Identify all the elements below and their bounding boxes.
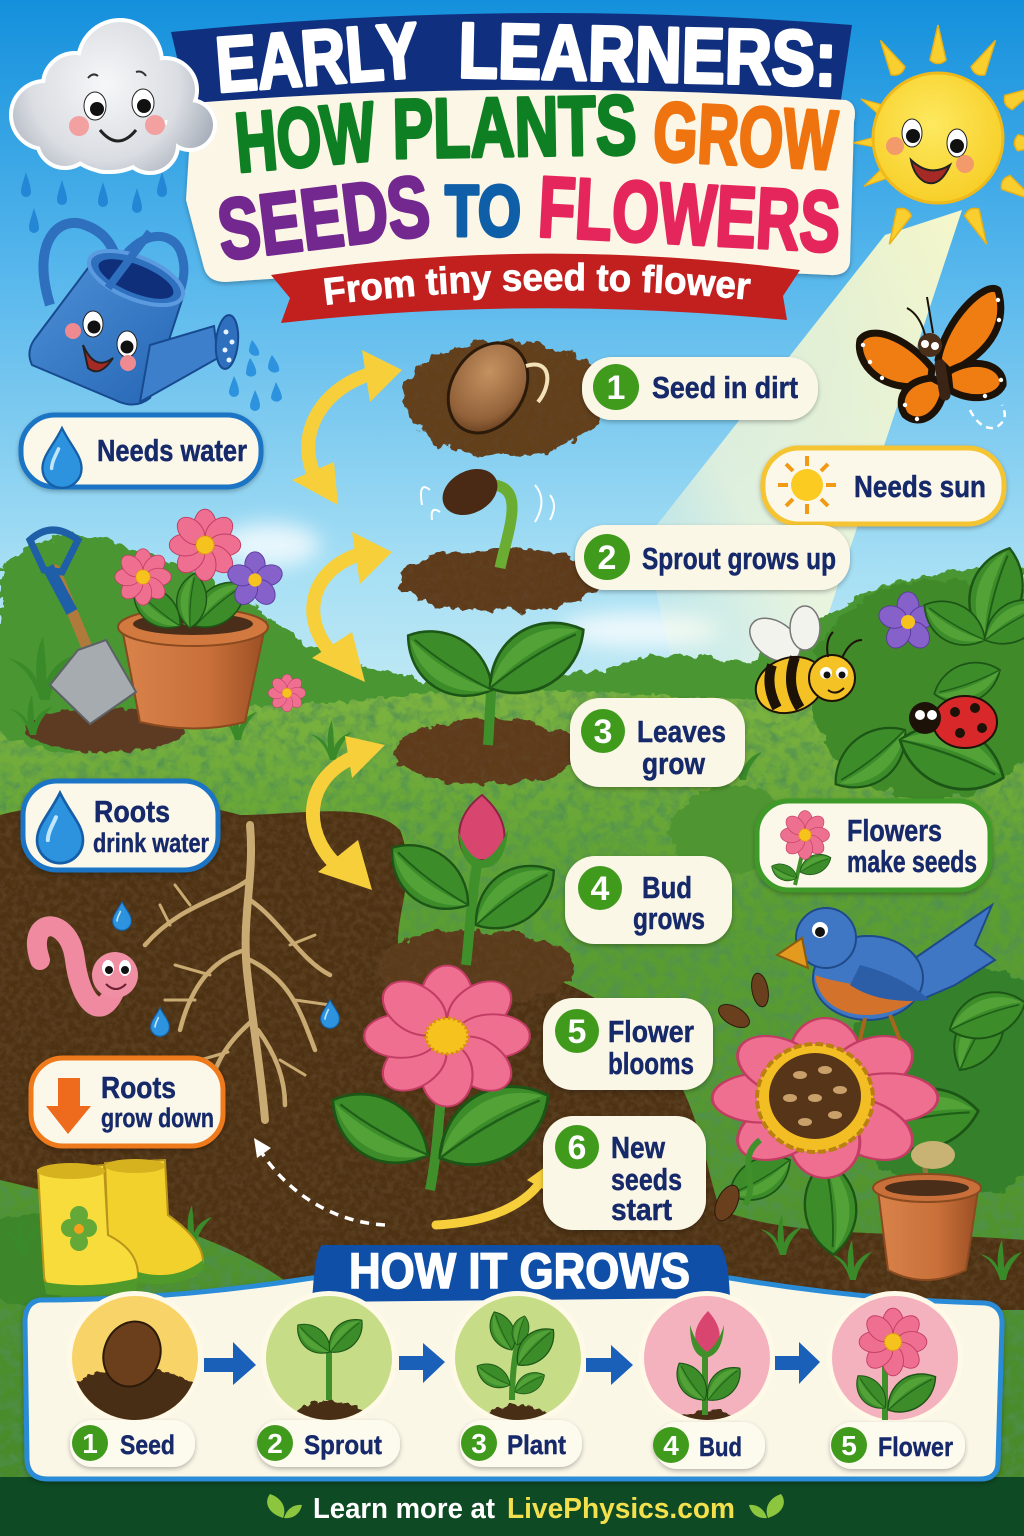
step 3: plant: [455, 1291, 581, 1420]
step label: seed: [70, 1420, 195, 1467]
dirt under planted pot: [25, 708, 185, 752]
number badge 2: [584, 534, 630, 580]
pill: needs water: [21, 415, 261, 488]
small pot with seedling: [873, 1141, 981, 1280]
step pill 5: flower blooms: [543, 998, 713, 1090]
number badge 3: 3: [594, 713, 612, 751]
footer bar: [0, 1477, 1024, 1536]
label: blooms: [608, 1046, 694, 1081]
meadow grass: [0, 690, 1024, 1500]
shovel: [30, 530, 136, 724]
step label: seed: Seed: [120, 1430, 175, 1460]
red ribbon: [271, 254, 800, 323]
water spray: [229, 340, 282, 411]
right leaves: [914, 541, 1024, 713]
step label: sprout: Sprout: [304, 1430, 382, 1460]
raindrops: [21, 172, 167, 233]
pill: flowers make seeds: [757, 801, 990, 890]
pill: roots drink water: [23, 781, 218, 870]
top blue banner: [171, 13, 852, 120]
soft distant clouds: [220, 523, 720, 648]
title line: how plants grow: HOW: [231, 84, 380, 190]
step label: sprout: [257, 1420, 400, 1467]
label: New: [611, 1130, 666, 1165]
dashed return arrow: [254, 1138, 385, 1225]
grass tufts: [0, 636, 1022, 1280]
icon: flower: [768, 811, 834, 885]
stage 2: sprout: [398, 460, 602, 612]
step label: sprout: 2: [267, 1428, 283, 1459]
title line: early learners: [213, 6, 838, 109]
label: flowers make seeds: make seeds: [847, 844, 977, 879]
icon: water drop: [42, 428, 82, 488]
label: Flower: [608, 1014, 694, 1049]
step pill 2: sprout grows up: [575, 525, 850, 590]
title line: seeds to flowers: FLOWERS: [536, 159, 843, 271]
soil water drops: [113, 902, 339, 1036]
label: needs water: Needs water: [97, 433, 247, 468]
title line: seeds to flowers: TO: [445, 172, 521, 252]
stage 3: leaves: [393, 603, 598, 784]
label: seeds: [611, 1162, 682, 1197]
seed-head flower and foliage: [712, 981, 1024, 1257]
step label: plant: [460, 1420, 582, 1467]
step label: bud: 4: [663, 1430, 679, 1461]
label: needs sun: Needs sun: [854, 469, 986, 504]
step 2: sprout: [266, 1291, 392, 1420]
step pill 1: seed in dirt: [582, 357, 818, 420]
icon: water drop: [37, 793, 83, 863]
label: grows: [633, 901, 705, 936]
step 1: seed: [72, 1291, 198, 1420]
step label: seed: 1: [82, 1428, 98, 1459]
roots: [145, 825, 330, 1120]
number badge 4: 4: [591, 870, 610, 908]
potted flowers: [115, 509, 306, 728]
step label: bud: [653, 1422, 765, 1469]
footer text: Learn more at: [313, 1493, 495, 1525]
number badge 6: 6: [568, 1129, 586, 1167]
label: Sprout grows up: [642, 541, 836, 576]
cloud character: [13, 22, 213, 171]
title line: seeds to flowers: [213, 158, 843, 279]
purple flower: [876, 592, 940, 653]
step label: plant: 3: [471, 1428, 487, 1459]
ladybug on leaf: [822, 696, 1014, 804]
panel: how it grows: [25, 1243, 1002, 1479]
soil cross-section: [0, 800, 1024, 1310]
label: Leaves: [637, 714, 726, 749]
label: roots grow down: Roots: [101, 1070, 176, 1105]
worm: [37, 926, 138, 1007]
number badge 2: 2: [598, 539, 616, 577]
label: Seed in dirt: [652, 370, 798, 405]
title line: early learners: LEARNERS:: [458, 6, 838, 103]
pill: needs sun: [763, 448, 1004, 524]
falling seeds: [710, 972, 771, 1224]
icon: down arrow: [46, 1078, 91, 1134]
number badge 5: 5: [568, 1013, 586, 1051]
label: roots drink water: drink water: [93, 828, 209, 858]
number badge 1: [593, 364, 639, 410]
title line: seeds to flowers: SEEDS: [213, 158, 435, 279]
bee: [742, 606, 862, 722]
stage 4: bud: [375, 795, 575, 1006]
step pill 3: leaves grow: [570, 698, 745, 787]
step label: plant: Plant: [507, 1430, 566, 1460]
butterfly: [859, 288, 1005, 428]
title line: early learners: EARLY: [213, 6, 422, 109]
pill: roots grow down: [31, 1058, 223, 1146]
stage 1: seed in soil: [403, 328, 607, 456]
cream title panel: [186, 90, 855, 282]
number badge 4: [578, 866, 622, 910]
watering can character: [29, 223, 240, 405]
number badge 3: [581, 709, 625, 753]
label: Bud: [642, 870, 692, 905]
title line: how plants grow: GROW: [651, 84, 840, 188]
icon: small sun: [778, 456, 836, 514]
label: roots grow down: grow down: [101, 1103, 214, 1133]
label: roots drink water: Roots: [94, 794, 170, 829]
footer text: LivePhysics.com: [507, 1493, 735, 1525]
panel heading: HOW IT GROWS: [349, 1243, 690, 1299]
distant bushes: [0, 536, 1024, 820]
step label: flower: Flower: [878, 1432, 953, 1462]
step label: flower: 5: [841, 1430, 857, 1461]
number badge 6: [555, 1125, 599, 1169]
title line: how plants grow: [231, 78, 840, 190]
bluebird: [777, 905, 995, 1040]
step label: flower: [830, 1422, 965, 1469]
label: grow: [642, 746, 706, 781]
right foliage: [0, 580, 1024, 1305]
step 4: bud: [644, 1291, 770, 1420]
step label: bud: Bud: [699, 1432, 742, 1462]
step 5: flower: [827, 1291, 963, 1425]
sun character: [853, 25, 1024, 248]
sunbeam: [645, 210, 962, 700]
number badge 1: 1: [607, 369, 625, 407]
rubber boots: [37, 1159, 204, 1296]
panel tab: [312, 1245, 730, 1302]
sky background: [0, 0, 1024, 760]
stage 5: flower: [317, 966, 564, 1190]
step pill 6: new seeds start: [543, 1116, 706, 1230]
footer leaf icons: [267, 1494, 784, 1518]
flow arrows: [204, 1342, 820, 1385]
label: flowers make seeds: Flowers: [847, 813, 942, 848]
title banner: [171, 6, 858, 323]
growth arrow 1: [292, 350, 402, 505]
yellow arrow to new seeds: [436, 1162, 552, 1225]
subtitle: From tiny seed to flower: [324, 262, 751, 306]
label: start: [611, 1192, 672, 1227]
number badge 5: [555, 1009, 599, 1053]
title line: how plants grow: PLANTS: [392, 78, 637, 176]
growth arrow 3: [313, 736, 385, 890]
growth arrow 2: [312, 532, 392, 682]
step pill 4: bud grows: [565, 856, 732, 944]
